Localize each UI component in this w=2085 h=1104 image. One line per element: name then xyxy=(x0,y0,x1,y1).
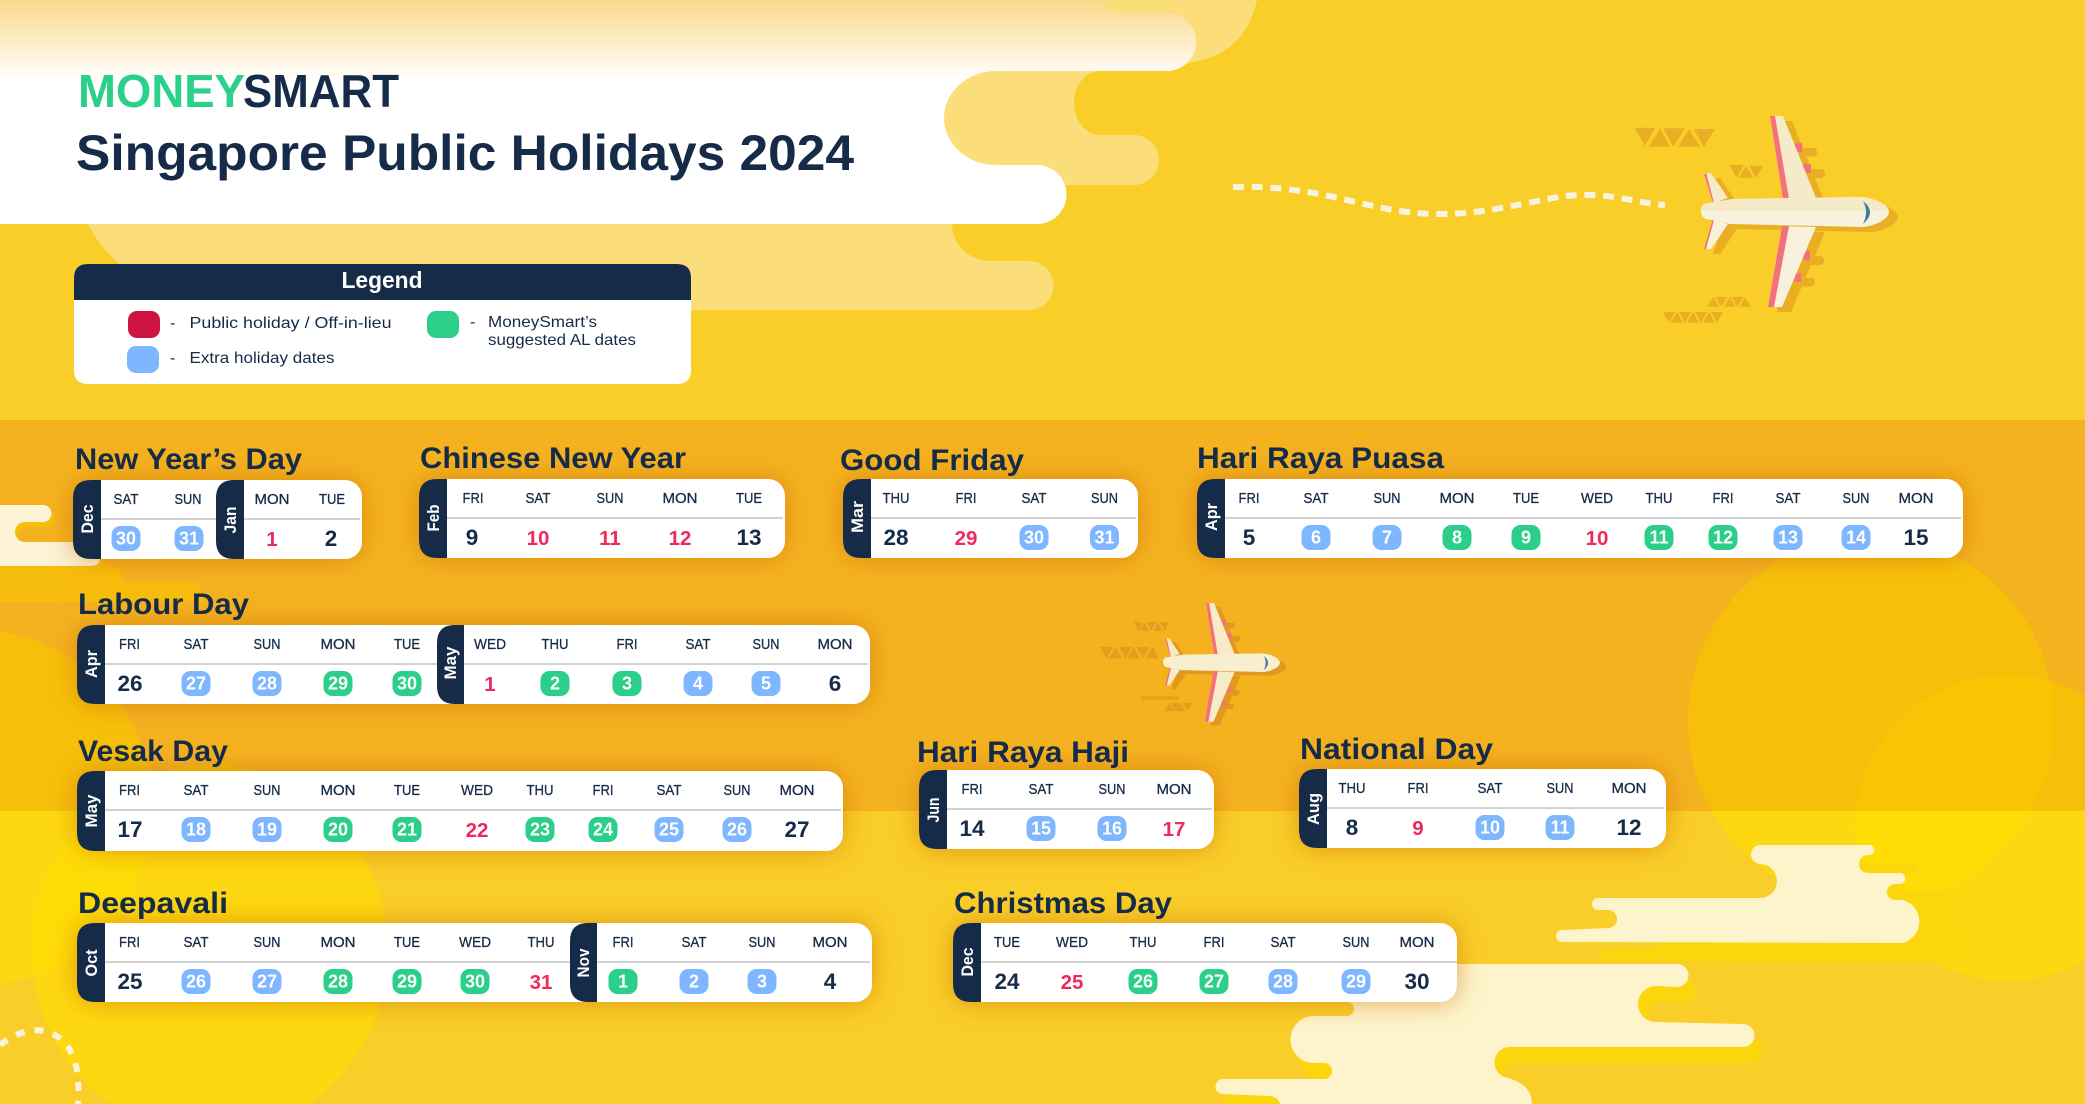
panel: New Year's Day: Dec xyxy=(78,504,97,534)
panel: Deepavali: SAT xyxy=(184,934,208,951)
panel: Hari Raya Puasa: 10 xyxy=(1586,527,1608,550)
panel: Deepavali: FRI xyxy=(612,934,634,951)
panel: Hari Raya Puasa: 8 xyxy=(1452,528,1462,548)
panel: Chinese New Year: 9 xyxy=(466,525,478,550)
logo xyxy=(78,65,399,117)
panel: Hari Raya Haji: 16 xyxy=(1102,818,1122,838)
panel: Deepavali: TUE xyxy=(394,934,420,951)
heading: Chinese New Year xyxy=(420,442,686,475)
panel: New Year's Day: SUN xyxy=(174,491,202,508)
panel: National Day: 12 xyxy=(1616,815,1642,840)
panel: National Day: MON xyxy=(1612,780,1646,797)
panel: Deepavali: SUN xyxy=(254,934,280,951)
panel: Vesak Day: MON xyxy=(320,782,356,799)
yellow shadow of lower cloud xyxy=(1224,980,1762,1104)
legend item: suggested AL: - xyxy=(470,314,475,331)
background circles: band part xyxy=(0,556,2085,811)
panel: Hari Raya Puasa: 9 xyxy=(1521,528,1531,548)
panel: Vesak Day: SUN xyxy=(724,782,750,799)
heading: National Day xyxy=(1300,733,1493,766)
white header cloud xyxy=(0,0,1196,224)
pale cloud: lower lobe xyxy=(88,224,1054,310)
pale cloud: top right blob xyxy=(1100,0,1257,71)
heading: Christmas Day xyxy=(954,887,1172,920)
panel: Labour Day: 4 xyxy=(693,674,703,694)
panel: Deepavali: Oct xyxy=(82,949,101,976)
panel: Christmas Day: MON xyxy=(1400,934,1434,951)
legend item: public holiday: Public holiday / Off-in-lieu xyxy=(190,315,392,332)
panel: Christmas Day: 26 xyxy=(1133,972,1153,992)
panel: Chinese New Year: 10 xyxy=(527,527,549,550)
panel: Christmas Day: Dec xyxy=(958,948,977,976)
panel: Christmas Day: 27 xyxy=(1204,972,1224,992)
panel: National Day: SAT xyxy=(1478,780,1502,797)
panel: Vesak Day xyxy=(77,735,843,851)
panel: Vesak Day: 26 xyxy=(727,820,747,840)
yellow shadow of right cloud xyxy=(1600,864,1963,962)
panel: Christmas Day: 29 xyxy=(1346,972,1366,992)
panel: Labour Day: 6 xyxy=(829,671,841,696)
panel: Deepavali: 27 xyxy=(257,972,277,992)
panel: National Day xyxy=(1299,733,1666,848)
panel: New Year's Day: MON xyxy=(254,491,290,508)
pale cloud: upper lobe xyxy=(930,60,1159,185)
panel: Labour Day: TUE xyxy=(394,636,420,653)
heading: Hari Raya Haji xyxy=(917,736,1129,769)
panel: Good Friday: FRI xyxy=(956,490,976,507)
panel: Chinese New Year: 11 xyxy=(599,527,621,550)
panel: Christmas Day: SAT xyxy=(1270,934,1296,951)
panel: Deepavali xyxy=(77,887,872,1002)
logo: MONEY xyxy=(78,65,245,117)
panel: Hari Raya Puasa: Apr xyxy=(1202,503,1221,531)
panel: Vesak Day: 27 xyxy=(784,817,810,842)
panel: Hari Raya Haji: 15 xyxy=(1031,818,1051,838)
panel: Good Friday: 28 xyxy=(883,525,909,550)
panel: Christmas Day xyxy=(953,887,1457,1002)
panel: Vesak Day: MON xyxy=(780,782,814,799)
panel: Hari Raya Puasa: THU xyxy=(1646,490,1672,507)
panel: Deepavali: 26 xyxy=(186,972,206,992)
panel: Labour Day: SUN xyxy=(254,636,280,653)
panel: Labour Day: 5 xyxy=(761,674,771,694)
panel: Hari Raya Haji: 17 xyxy=(1163,818,1185,841)
background circles: lower part xyxy=(0,811,2085,1104)
panel: Labour Day: MON xyxy=(320,636,356,653)
panel: Chinese New Year: SUN xyxy=(596,490,624,507)
panel: Christmas Day: SUN xyxy=(1342,934,1370,951)
panel: Hari Raya Puasa xyxy=(1197,442,1963,558)
panel: Labour Day: 26 xyxy=(117,671,143,696)
panel: Vesak Day: 25 xyxy=(659,820,679,840)
panel: Hari Raya Puasa: 5 xyxy=(1243,525,1255,550)
panel: Hari Raya Haji xyxy=(917,736,1214,849)
panel: Labour Day: SAT xyxy=(184,636,208,653)
panel: National Day: 8 xyxy=(1346,815,1358,840)
panel: Labour Day: 2 xyxy=(550,674,560,694)
panel: Labour Day: THU xyxy=(542,636,568,653)
panel: Chinese New Year xyxy=(419,442,785,558)
panel: Hari Raya Puasa: FRI xyxy=(1238,490,1260,507)
panel: Vesak Day: SAT xyxy=(184,782,208,799)
heading: New Year’s Day xyxy=(75,443,302,476)
heading: Vesak Day xyxy=(78,735,228,768)
panel: Chinese New Year: Feb xyxy=(424,504,443,532)
legend item: suggested AL xyxy=(427,311,636,349)
panel: Good Friday: SAT xyxy=(1022,490,1046,507)
panel: Labour Day: 3 xyxy=(622,674,632,694)
panel: New Year's Day: 31 xyxy=(179,528,199,548)
icon: small airplane xyxy=(1163,603,1286,725)
panel: Hari Raya Puasa: FRI xyxy=(1712,490,1734,507)
panel: Chinese New Year: 13 xyxy=(736,525,762,550)
panel: Hari Raya Haji: MON xyxy=(1156,781,1192,798)
dashed flight trail xyxy=(1233,187,1665,214)
panel: Christmas Day: THU xyxy=(1130,934,1156,951)
small plane cloud shadows xyxy=(1100,622,1192,711)
panel: Vesak Day: FRI xyxy=(119,782,140,799)
panel: Labour Day: 30 xyxy=(397,674,417,694)
cream cloud lower xyxy=(1216,964,1754,1104)
panel: National Day: 11 xyxy=(1550,818,1570,838)
panel: Good Friday: SUN xyxy=(1091,490,1118,507)
panel: Labour Day: FRI xyxy=(119,636,140,653)
panel: Hari Raya Puasa: 14 xyxy=(1846,528,1866,548)
panel: Hari Raya Puasa: 11 xyxy=(1649,528,1669,548)
panel: Deepavali: MON xyxy=(320,934,356,951)
panel: Chinese New Year: 12 xyxy=(669,527,691,550)
panel: Hari Raya Puasa: SUN xyxy=(1842,490,1870,507)
panel: Hari Raya Haji: SUN xyxy=(1098,781,1126,798)
panel: Hari Raya Puasa: 6 xyxy=(1311,528,1321,548)
legend item: public holiday xyxy=(128,311,392,338)
panel: Deepavali: Nov xyxy=(574,948,593,978)
panel: Vesak Day: 20 xyxy=(328,820,348,840)
panel: Vesak Day: May xyxy=(82,794,101,828)
panel: Deepavali: 29 xyxy=(397,972,417,992)
panel: Deepavali: 25 xyxy=(117,969,143,994)
panel: New Year's Day: Jan xyxy=(221,506,240,534)
panel: Hari Raya Puasa: SAT xyxy=(1304,490,1328,507)
panel: Christmas Day: 24 xyxy=(994,969,1020,994)
panel: Christmas Day: 28 xyxy=(1273,972,1293,992)
panel: Hari Raya Puasa: MON xyxy=(1898,490,1934,507)
panel: Hari Raya Puasa: 15 xyxy=(1903,525,1929,550)
left cloud inner shadow xyxy=(3,510,103,571)
panel: Labour Day: May xyxy=(441,646,460,680)
panel: Deepavali: 1 xyxy=(618,972,628,992)
panel: Labour Day: FRI xyxy=(616,636,638,653)
panel: Hari Raya Puasa: WED xyxy=(1581,490,1613,507)
panel: Hari Raya Puasa: 12 xyxy=(1713,528,1733,548)
panel: Deepavali: SUN xyxy=(748,934,776,951)
panel: Labour Day: 28 xyxy=(257,674,277,694)
panel: Chinese New Year: MON xyxy=(662,490,698,507)
panel: Hari Raya Puasa: SAT xyxy=(1776,490,1800,507)
panel: Hari Raya Haji: Jun xyxy=(924,798,943,822)
panel: Good Friday: Mar xyxy=(848,501,867,533)
panel: Vesak Day: 24 xyxy=(593,820,613,840)
panel: Labour Day: 27 xyxy=(186,674,206,694)
panel: Deepavali: 3 xyxy=(757,972,767,992)
panel: Labour Day: SUN xyxy=(752,636,780,653)
panel: Good Friday: THU xyxy=(882,490,910,507)
panel: Labour Day: 29 xyxy=(328,674,348,694)
panel: National Day: THU xyxy=(1338,780,1366,797)
panel: Labour Day xyxy=(77,588,870,704)
panel: Christmas Day: 30 xyxy=(1404,969,1430,994)
panel: Hari Raya Haji: FRI xyxy=(962,781,982,798)
panel: Christmas Day: WED xyxy=(1056,934,1088,951)
panel: Vesak Day: SAT xyxy=(656,782,682,799)
panel: Labour Day: MON xyxy=(818,636,852,653)
legend item: extra holiday xyxy=(127,346,334,373)
legend item: public holiday: - xyxy=(170,315,175,332)
panel: Vesak Day: 23 xyxy=(530,820,550,840)
heading: Deepavali xyxy=(78,887,228,920)
panel: Deepavali: MON xyxy=(812,934,848,951)
panel: Good Friday: 31 xyxy=(1094,528,1115,548)
orange middle band xyxy=(0,420,2085,811)
panel: Labour Day: SAT xyxy=(686,636,710,653)
panel: Vesak Day: 17 xyxy=(117,817,143,842)
heading: Labour Day xyxy=(78,588,249,621)
panel: Vesak Day: WED xyxy=(461,782,493,799)
panel: New Year's Day: 1 xyxy=(266,528,278,551)
panel: New Year's Day: 30 xyxy=(116,528,136,548)
panel: Hari Raya Haji: SAT xyxy=(1028,781,1054,798)
panel: Deepavali: WED xyxy=(459,934,491,951)
panel: National Day: FRI xyxy=(1408,780,1428,797)
panel: Vesak Day: SUN xyxy=(254,782,280,799)
panel: Deepavali: 4 xyxy=(824,969,837,994)
panel: Vesak Day: 19 xyxy=(257,820,277,840)
panel: Deepavali: 2 xyxy=(689,972,699,992)
panel: Vesak Day: THU xyxy=(526,782,554,799)
panel: New Year's Day xyxy=(73,443,362,559)
panel: National Day: SUN xyxy=(1546,780,1574,797)
panel: Hari Raya Puasa: TUE xyxy=(1513,490,1539,507)
panel: Christmas Day: FRI xyxy=(1204,934,1224,951)
panel: Hari Raya Puasa: 13 xyxy=(1778,528,1798,548)
panel: Deepavali: FRI xyxy=(119,934,140,951)
heading: Hari Raya Puasa xyxy=(1197,442,1444,475)
panel: Deepavali: 31 xyxy=(530,971,552,994)
cloud shadows xyxy=(1634,128,1763,322)
title: Singapore Public Holidays 2024 xyxy=(76,125,854,181)
panel: Chinese New Year: SAT xyxy=(526,490,550,507)
panel: Vesak Day: TUE xyxy=(394,782,420,799)
legend item: suggested AL: MoneySmart’s xyxy=(488,314,597,331)
panel: Labour Day: WED xyxy=(474,636,506,653)
panel: National Day: 10 xyxy=(1480,818,1500,838)
left cloud shadow xyxy=(0,566,204,602)
panel: Hari Raya Haji: 14 xyxy=(959,816,985,841)
panel: National Day: Aug xyxy=(1304,793,1323,825)
panel: Deepavali: THU xyxy=(528,934,554,951)
panel: Good Friday xyxy=(840,444,1138,558)
icon: large airplane xyxy=(1701,116,1898,312)
panel: Deepavali: 30 xyxy=(465,972,485,992)
panel: Vesak Day: 18 xyxy=(186,820,206,840)
panel: Chinese New Year: FRI xyxy=(462,490,484,507)
logo: SMART xyxy=(243,65,399,117)
dashed arc bottom left xyxy=(0,1030,79,1104)
panel: Good Friday: 30 xyxy=(1024,528,1044,548)
panel: Vesak Day: FRI xyxy=(592,782,614,799)
panel: Good Friday: 29 xyxy=(955,527,977,550)
panel: Deepavali: SAT xyxy=(682,934,706,951)
panel: National Day: 9 xyxy=(1412,817,1424,840)
legend: Legend xyxy=(342,267,422,293)
legend item: extra holiday: Extra holiday dates xyxy=(190,350,334,367)
legend xyxy=(74,264,691,384)
cream cloud right xyxy=(1556,845,1919,943)
panel: Vesak Day: 21 xyxy=(397,820,417,840)
panel: New Year's Day: 2 xyxy=(325,526,337,551)
legend item: extra holiday: - xyxy=(170,350,175,367)
panel: Vesak Day: 22 xyxy=(466,819,488,842)
panel: Christmas Day: 25 xyxy=(1061,971,1083,994)
panel: Labour Day: Apr xyxy=(82,650,101,678)
panel: Christmas Day: TUE xyxy=(994,934,1020,951)
panel: Labour Day: 1 xyxy=(484,673,496,696)
panel: New Year's Day: SAT xyxy=(114,491,138,508)
panel: New Year's Day: TUE xyxy=(319,491,345,508)
panel: Hari Raya Puasa: 7 xyxy=(1382,528,1392,548)
panel: Hari Raya Puasa: MON xyxy=(1440,490,1474,507)
panel: Deepavali: 28 xyxy=(328,972,348,992)
left cream cloud xyxy=(0,505,100,566)
panel: Hari Raya Puasa: SUN xyxy=(1374,490,1400,507)
heading: Good Friday xyxy=(840,444,1024,477)
panel: Chinese New Year: TUE xyxy=(736,490,762,507)
legend item: suggested AL: suggested AL dates xyxy=(488,332,636,349)
